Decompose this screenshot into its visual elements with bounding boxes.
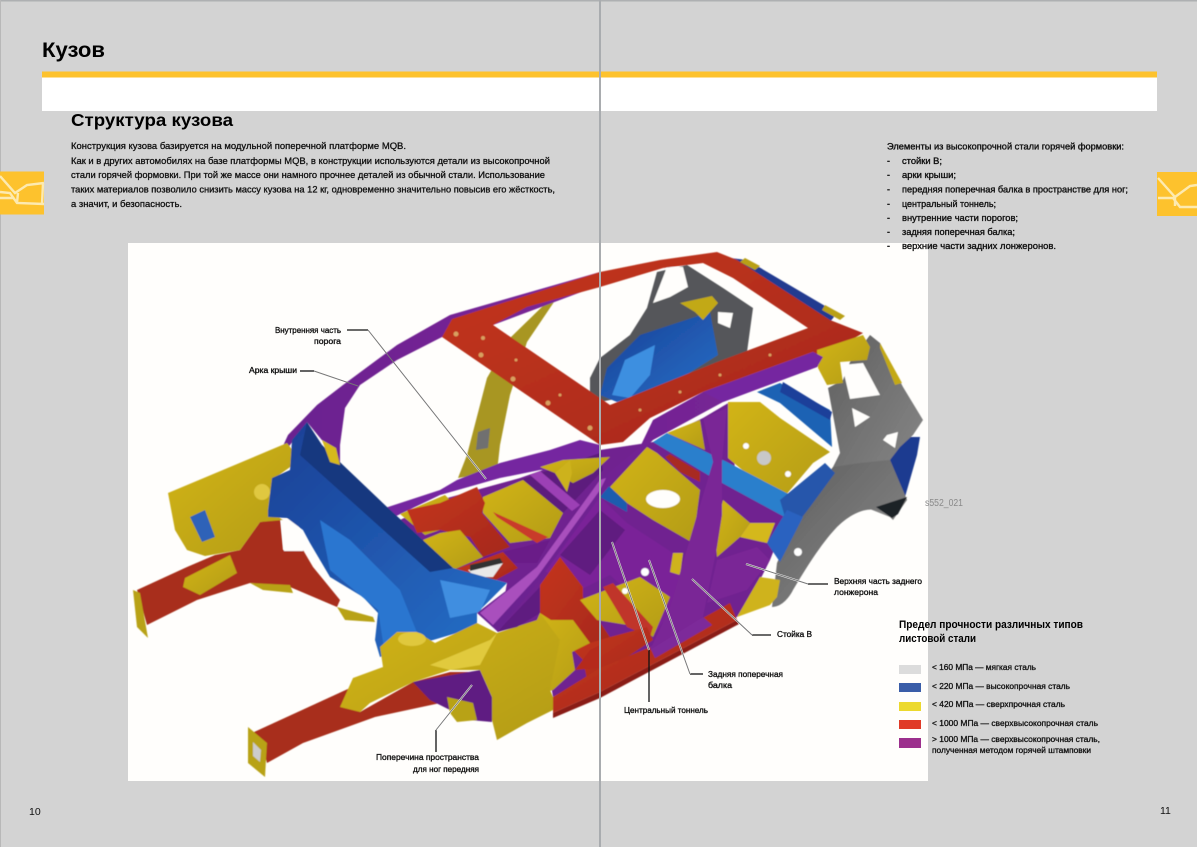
- legend: extra high strength steel: [899, 700, 1065, 711]
- centre floor right: [530, 497, 775, 697]
- legend: high strength steel: < 220 МПа — высокопрочная сталь: [932, 682, 1070, 691]
- legend: extra high strength steel: < 420 МПа — сверхпрочная сталь: [932, 700, 1065, 709]
- title: Кузов: [42, 39, 105, 62]
- callout: inner sill: порога: [314, 336, 341, 346]
- car body structure: [133, 252, 923, 777]
- far sill: [385, 440, 600, 518]
- near B pillar: [650, 408, 727, 650]
- legend: mild steel: < 160 МПа — мягкая сталь: [932, 663, 1036, 672]
- centre fold line: [599, 0, 601, 847]
- far front fender: [168, 443, 375, 622]
- callout: B pillar: [692, 579, 812, 639]
- text block: hot-formed steel elements: -: [887, 227, 890, 237]
- callout: front foot-space crossmember: для ног передняя: [413, 764, 479, 774]
- panel: diagram background: [128, 243, 928, 781]
- legend: hot-stamped steel: [899, 735, 1100, 755]
- near A pillar and roof rail: [477, 352, 827, 632]
- callout: front foot-space crossmember: [376, 685, 479, 774]
- text block: hot-formed steel elements: передняя поперечная балка в пространстве для ног;: [902, 184, 1128, 194]
- rear sill end: [737, 577, 780, 617]
- intro text block: [71, 141, 555, 209]
- text: last list item: -: [887, 241, 890, 251]
- callout: upper rear longeron: [746, 564, 922, 597]
- callout: central tunnel: Центральный тоннель: [624, 705, 708, 715]
- legend: hot-stamped steel: > 1000 МПа — сверхвысокопрочная сталь,: [932, 735, 1100, 744]
- legend heading: Предел прочности различных типов: [899, 619, 1083, 631]
- near front fender: [340, 613, 560, 740]
- text: last list item: верхние части задних лонжеронов.: [902, 241, 1056, 251]
- legend: steel strength: [899, 619, 1100, 755]
- intro text block: стали горячей формовки. При той же массе они намного прочнее деталей из обычной стали. Использование: [71, 170, 545, 180]
- far A pillar and roof arch: [272, 272, 600, 470]
- far B pillar: [458, 302, 554, 478]
- text block: hot-formed steel elements: -: [887, 184, 890, 194]
- legend: mild steel: [899, 663, 1036, 674]
- text block: hot-formed steel elements: внутренние части порогов;: [902, 213, 1018, 223]
- text block: hot-formed steel elements: стойки В;: [902, 156, 942, 166]
- centre floor left: [400, 453, 610, 587]
- far roof rail: [730, 258, 845, 322]
- text block: hot-formed steel elements: Элементы из высокопрочной стали горячей формовки:: [887, 142, 1124, 152]
- legend heading: [899, 619, 1083, 645]
- heading: body structure: Структура кузова: [71, 110, 233, 130]
- legend: ultra high strength steel: < 1000 МПа — сверхвысокопрочная сталь: [932, 719, 1098, 728]
- purple rail end: [703, 352, 823, 402]
- text block: hot-formed steel elements: задняя поперечная балка;: [902, 227, 1015, 237]
- legend heading: листовой стали: [899, 633, 976, 645]
- text block: hot-formed steel elements: -: [887, 199, 890, 209]
- intro text block: Конструкция кузова базируется на модульной поперечной платформе MQB.: [71, 141, 406, 151]
- header band: [42, 72, 1157, 111]
- callout: B pillar: Стойка В: [777, 629, 812, 639]
- rear floor: [600, 382, 832, 543]
- firewall blue strut: [268, 422, 507, 657]
- near front rail: [248, 670, 492, 777]
- text block: hot-formed steel elements: -: [887, 170, 890, 180]
- callout: inner sill: [275, 325, 486, 479]
- text block: hot-formed steel elements: арки крыши;: [902, 170, 956, 180]
- callout: roof arch: [249, 365, 358, 386]
- rear yellow joint: [817, 335, 870, 385]
- floor base: [400, 402, 790, 697]
- callout: upper rear longeron: лонжерона: [834, 587, 878, 597]
- callout: upper rear longeron: Верхняя часть заднего: [834, 576, 922, 586]
- callout: central tunnel: [612, 542, 708, 715]
- rivet details on roof panel: [454, 332, 772, 430]
- callout: rear crossmember: Задняя поперечная: [708, 669, 783, 679]
- legend: hot-stamped steel: полученная методом горячей штамповки: [932, 746, 1091, 755]
- rear wheel arch and gray structure: [767, 335, 923, 607]
- text block: hot-formed steel elements: центральный тоннель;: [902, 199, 996, 209]
- far front rail: [133, 518, 340, 638]
- callout: rear crossmember: балка: [708, 680, 732, 690]
- text block: hot-formed steel elements: -: [887, 156, 890, 166]
- callout: rear crossmember: [649, 560, 783, 690]
- figure code: s552_021: [925, 498, 963, 509]
- far rear pillar and inner panel: [590, 265, 753, 402]
- intro text block: Как и в других автомобилях на базе платформы MQB, в конструкции используются детали из высокопрочной: [71, 156, 550, 166]
- roof red ring: [442, 252, 863, 445]
- icon: car body tab right: [1157, 172, 1197, 216]
- intro text block: таких материалов позволило снизить массу кузова на 12 кг, одновременно значительно повысив его жёсткость,: [71, 184, 555, 194]
- near sill: [553, 603, 739, 718]
- page number right: 11: [1160, 805, 1171, 817]
- callout: roof arch: Арка крыши: [249, 365, 297, 375]
- legend: high strength steel: [899, 682, 1070, 692]
- callout: front foot-space crossmember: Поперечина пространства: [376, 752, 479, 762]
- intro text block: а значит, и безопасность.: [71, 199, 182, 209]
- callout: inner sill: Внутренняя часть: [275, 325, 341, 335]
- page number left: 10: [29, 806, 41, 818]
- text block: hot-formed steel elements: [887, 142, 1128, 237]
- icon: car body tab left: [0, 172, 44, 214]
- text block: hot-formed steel elements: -: [887, 213, 890, 223]
